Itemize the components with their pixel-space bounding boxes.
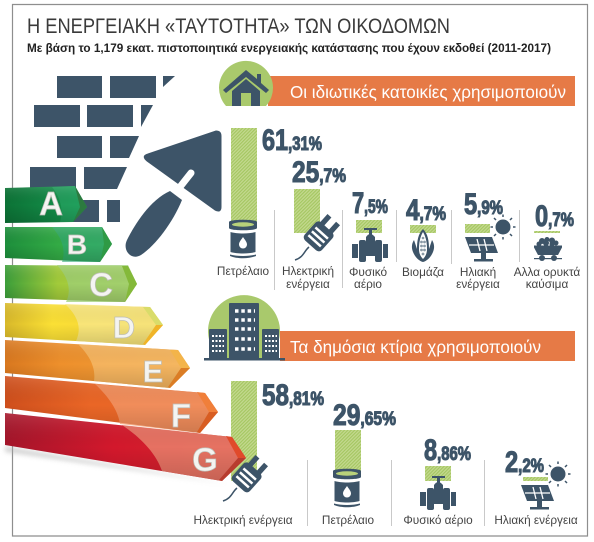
bar: public electricity — [231, 381, 257, 481]
chart: private homes electricity 25.7%: 25,7% — [292, 156, 346, 189]
arrow G — [5, 413, 246, 481]
chart: private homes oil 61.31% — [217, 124, 322, 278]
chart: public electricity 58.81%: 58,81% — [262, 379, 324, 412]
title: Η ΕΝΕΡΓΕΙΑΚΗ «ΤΑΥΤΟΤΗΤΑ» ΤΩΝ ΟΙΚΟΔΟΜΩΝ — [27, 15, 450, 38]
arrow D — [5, 303, 163, 345]
chart: private homes other fossil fuels 0.7%: 0,7% — [535, 200, 574, 233]
icon: brick wall — [30, 76, 175, 222]
chart: private homes electricity 25.7% — [282, 156, 346, 291]
arrow E — [5, 340, 190, 389]
orange banner — [268, 76, 575, 106]
panel: public buildings header — [204, 295, 575, 361]
arrow F — [5, 376, 218, 434]
subtitle: Με βάση το 1,179 εκατ. πιστοποιητικά ενεργειακής κατάστασης που έχουν εκδοθεί (2011-2017) — [27, 43, 551, 55]
arrow E: E — [143, 354, 163, 389]
arrow B: B — [67, 229, 87, 260]
chart: private homes biomass 4.7%: 4,7% — [406, 194, 446, 227]
icon: house — [219, 61, 273, 106]
chart: private homes natural gas 7.5%: αέριο — [354, 277, 382, 291]
chart: private homes electricity 25.7%: ενέργεια — [286, 277, 330, 291]
chart: public natural gas 8.86%: 8,86% — [424, 434, 471, 467]
chart: private homes solar 5.9% — [456, 188, 516, 291]
chart: private homes other fossil fuels 0.7%: Αλλα ορυκτά — [514, 265, 580, 279]
arrow D: D — [113, 310, 135, 345]
chart: private homes biomass 4.7% — [402, 194, 446, 279]
chart: private homes solar 5.9%: 5,9% — [464, 188, 503, 221]
chart: private homes other fossil fuels 0.7% — [514, 200, 580, 291]
arrow A — [5, 185, 87, 223]
chart: public solar 2.2%: 2,2% — [505, 446, 544, 479]
arrow C: C — [89, 266, 113, 303]
chart: public oil 29.65%: Πετρέλαιο — [322, 513, 374, 527]
energy rating arrows — [5, 185, 257, 484]
chart: public solar 2.2% — [494, 446, 578, 527]
chart: private homes electricity 25.7%: Ηλεκτρική — [282, 264, 334, 278]
panel: private homes header — [219, 61, 575, 106]
chart: public electricity 58.81%: Ηλεκτρική ενέργεια — [193, 513, 293, 527]
arrow B — [5, 227, 112, 262]
arrow C — [5, 265, 137, 303]
icon: office buildings — [204, 295, 285, 360]
dividers — [274, 210, 520, 526]
icon: trowel — [126, 131, 221, 257]
arrow G: G — [192, 441, 218, 478]
chart: public oil 29.65%: 29,65% — [333, 399, 396, 432]
chart: public natural gas 8.86% — [403, 434, 473, 527]
chart: public solar 2.2%: Ηλιακή ενέργεια — [494, 513, 578, 527]
chart: private homes natural gas 7.5%: Φυσικό — [349, 265, 387, 279]
arrow A: A — [39, 185, 63, 222]
chart: private homes other fossil fuels 0.7%: καύσιμα — [526, 277, 568, 291]
arrow F: F — [171, 397, 191, 434]
chart: private homes oil 61.31%: 61,31% — [262, 124, 322, 157]
orange banner — [280, 331, 575, 361]
chart: public electricity 58.81% — [193, 379, 324, 527]
chart: public oil 29.65% — [322, 399, 396, 527]
chart: private homes natural gas 7.5%: 7,5% — [352, 187, 388, 220]
chart: public natural gas 8.86%: Φυσικό αέριο — [403, 513, 473, 527]
chart: private homes solar 5.9%: ενέργεια — [456, 277, 500, 291]
banner text: Οι ιδιωτικές κατοικίες χρησιμοποιούν — [290, 82, 566, 102]
chart: private homes biomass 4.7%: Βιομάζα — [402, 265, 444, 279]
chart: private homes oil 61.31%: Πετρέλαιο — [217, 264, 269, 278]
chart: private homes natural gas 7.5% — [349, 187, 388, 291]
arrow G shadow — [5, 446, 228, 484]
banner text: Τα δημόσια κτίρια χρησιμοποιούν — [290, 337, 541, 357]
chart: private homes solar 5.9%: Ηλιακή — [460, 265, 496, 279]
